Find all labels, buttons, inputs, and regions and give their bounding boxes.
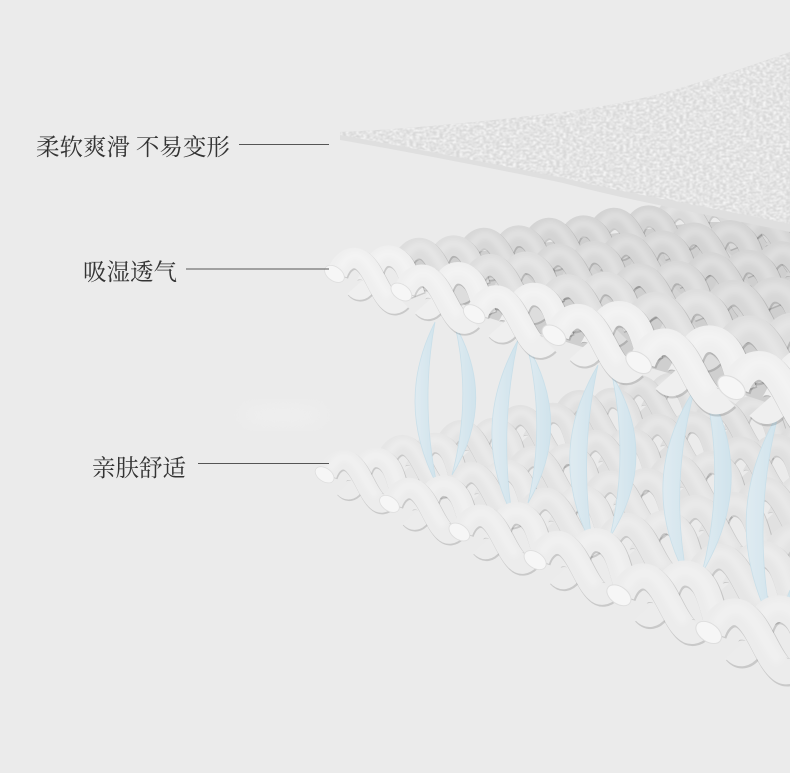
upper knit layer [321,184,790,431]
label: skin friendly: 亲肤舒适 [92,455,186,482]
label: breathable: 吸湿透气 [83,259,177,286]
faint background smudge [241,402,325,428]
lower knit layer, front row [312,455,790,673]
lower knit layer, back rows [386,380,790,652]
label: soft and smooth: 柔软爽滑 不易变形 [36,134,230,161]
top soft fabric sheet [340,52,790,232]
blue connecting fibers [415,322,790,625]
